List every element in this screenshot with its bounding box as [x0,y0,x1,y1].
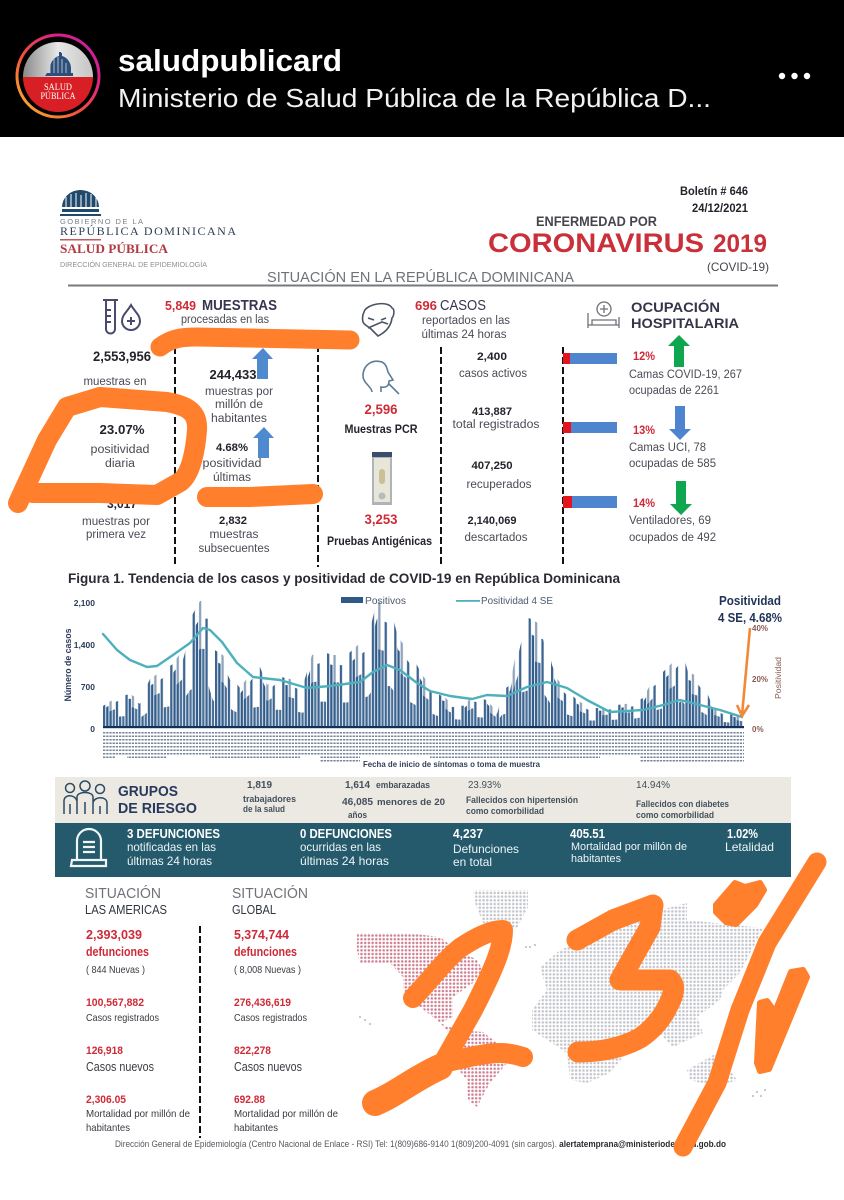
bar: camas covid [563,353,617,364]
stat: hipertensión: 23.93% [468,779,501,791]
stat: ventiladores: ocupados de 492 [629,532,716,544]
heading: muestras: MUESTRAS [202,298,277,314]
icon: people [64,781,107,814]
stat: muestras por primera vez: primera vez [86,529,146,541]
heading: ocupación hospitalaria [631,300,739,331]
stat: defunciones global: defunciones [234,944,297,959]
stat: defunciones notificadas: 3 DEFUNCIONES [127,827,220,841]
stat: mortalidad américas: habitantes [86,1122,130,1134]
stat: muestras por primera vez [82,497,150,541]
stat: letalidad [725,827,774,854]
account name: saludpublicard [118,43,342,78]
stat: muestras por millón: 244,433 [210,368,257,382]
figure title: Figura 1. Tendencia de los casos y positividad de COVID-19 en República Dominicana [68,571,620,586]
stat: camas covid [629,351,742,397]
stat: muestras pcr: 2,596 [364,402,398,417]
right axis labels: 0% [752,725,764,734]
stat: ventiladores: 14% [633,498,655,510]
stat: positividad últimas: últimas [213,472,251,484]
stat: pruebas antigénicas: Pruebas Antigénicas [327,534,432,548]
x axis title: Fecha de inicio de síntomas o toma de muestra [363,759,540,769]
stat: mortalidad global: Mortalidad por millón de [234,1108,338,1120]
stat: defunciones notificadas: últimas 24 horas [127,854,212,868]
stat: muestras por millón: millón de [215,399,263,411]
heading: global: SITUACIÓN [232,885,308,902]
icon: hospital bed [588,302,619,328]
panel: situación global [232,885,338,1134]
stat: recuperados: 407,250 [472,460,512,472]
stat: positividad diaria: positividad [90,444,150,456]
arrow: blue down [669,406,691,440]
stat: muestras en: muestras en [84,376,146,388]
stat: muestras subsecuentes: muestras [210,529,259,541]
stat: positividad diaria: diaria [105,458,136,470]
stat: hipertensión [466,779,578,817]
stat: positividad últimas: positividad [202,458,262,470]
stat: camas uci [629,425,716,470]
stat: casos nuevos américas [86,1045,154,1074]
bar: camas uci [563,422,617,433]
heading: grupos de riesgo: DE RIESGO [118,800,197,817]
stat: positividad diaria [90,423,150,470]
heading: casos: 696 [415,299,437,313]
stat: muestras pcr: Muestras PCR [344,422,418,436]
panel: casos [415,298,540,544]
stat: recuperados [466,460,532,491]
stat: trabajadores de la salud: trabajadores [243,794,296,805]
stat: mortalidad global: habitantes [234,1122,278,1134]
callout: positividad 4 SE: 4 SE, 4.68% [718,611,782,625]
stat: defunciones notificadas [127,827,220,868]
title: ENFERMEDAD POR [536,214,657,229]
panel: ocupación hospitalaria [563,300,742,544]
stat: defunciones américas: ( 844 Nuevas ) [86,964,145,976]
heading: muestras: procesadas en las [181,314,269,326]
stat: total registrados: total registrados [452,419,540,431]
stat: muestras en [84,349,151,388]
stat: total registrados: 413,887 [472,406,512,418]
government logo: SALUD PÚBLICA [60,242,168,256]
scribble: line over muestras [160,337,350,347]
stat: casos registrados global [234,997,307,1024]
heading: global [232,885,308,917]
stat: mortalidad: Mortalidad por millón de [571,841,687,853]
right axis labels: 40% [752,624,768,633]
legend: Positivos [365,596,406,607]
stat: casos registrados global: Casos registrados [234,1012,307,1024]
stat: ventiladores [629,498,716,544]
right axis labels [752,624,783,734]
icon: test tube and drop [103,300,140,334]
stat: camas uci: ocupadas de 585 [629,458,716,470]
stat: positividad diaria: 23.07% [100,423,144,437]
stat: casos activos: casos activos [459,368,527,380]
heading: las américas: LAS AMERICAS [85,903,167,917]
panel: muestras [82,298,277,555]
stat: pruebas antigénicas: 3,253 [364,512,398,527]
title: (COVID-19) [707,260,769,274]
stat: casos nuevos global: 822,278 [234,1045,271,1057]
stat: defunciones ocurridas: últimas 24 horas [300,854,389,868]
stat: embarazadas y menores: 1,614 [345,779,370,791]
stat: diabetes: 14.94% [636,779,670,791]
stat: casos activos: 2,400 [477,351,507,363]
heading: ocupación hospitalaria: HOSPITALARIA [631,316,739,331]
stat: casos activos [459,351,527,380]
arrow: up blue one [252,348,273,379]
panel: situación las américas [85,885,190,1134]
handwritten number 3 [577,905,674,1052]
bulletin number and date: 24/12/2021 [692,203,749,215]
arrow: orange pointer [737,628,750,716]
footer contact line: Dirección General de Epidemiología (Centro Nacional de Enlace - RSI) Tel: 1(809)686-9140 1(809)200-4091 (sin cargos). alertatemprana@ministeriodesalud.gob.do [115,1139,726,1150]
stat: casos registrados américas: 100,567,882 [86,997,144,1009]
map: americas in red [357,933,507,1107]
stat: positividad últimas: 4.68% [216,442,248,454]
account description: Ministerio de Salud Pública de la República D... [118,83,711,113]
stat: embarazadas y menores: 46,085 [342,796,373,808]
panel: defunciones [55,823,791,877]
world map [357,890,766,1107]
stat: defunciones ocurridas [300,827,392,868]
heading: las américas [85,885,167,917]
stat: recuperados: recuperados [466,479,532,491]
heading: casos: CASOS [440,298,486,314]
stat: defunciones en total: Defunciones [453,842,519,856]
stat: muestras subsecuentes [198,515,270,555]
stat: letalidad: Letalidad [725,840,774,854]
stat: trabajadores de la salud: 1,819 [247,779,272,791]
bar: ventiladores [563,496,617,508]
government logo [60,190,236,269]
heading: las américas: SITUACIÓN [85,885,161,902]
stat: muestras por millón: muestras por [205,386,273,398]
x axis date labels [103,732,744,763]
stat: defunciones global: ( 8,008 Nuevas ) [234,964,301,976]
stat: mortalidad global: 692.88 [234,1094,265,1106]
column dividers [175,345,563,1138]
stat: mortalidad [570,827,687,865]
stat: casos registrados global: 276,436,619 [234,997,291,1009]
stat: descartados: 2,140,069 [468,515,516,527]
stat: mortalidad américas: 2,306.05 [86,1094,126,1106]
stat: defunciones en total: en total [453,855,492,869]
stat: diabetes: como comorbilidad [636,810,714,821]
stat: defunciones ocurridas: ocurridas en las [300,840,381,854]
heading: muestras [165,298,277,326]
heading: grupos de riesgo [118,783,197,817]
map: islands [359,944,766,1097]
stat: muestras en: 2,553,956 [93,349,151,364]
icon: nasal swab [363,361,399,394]
stat: camas covid: ocupadas de 2261 [629,385,719,397]
stat: mortalidad américas: Mortalidad por millón de [86,1108,190,1120]
y axis labels: 2,100 [74,598,95,608]
stat: diabetes [636,779,729,821]
scribble: circle around positividad [18,397,197,503]
stat: muestras por primera vez: muestras por [82,516,150,528]
arrow: green down [670,481,692,515]
stat: descartados: descartados [464,532,528,544]
legend: Positividad 4 SE [481,596,553,607]
stat: pruebas antigénicas [327,512,432,548]
stat: mortalidad global [234,1094,338,1134]
stat: muestras por millón [205,368,273,425]
icon: antigen test strip [372,452,392,505]
stat: muestras pcr [344,402,418,436]
y axis labels: 700 [81,682,95,692]
title [488,214,769,274]
y axis labels [63,598,95,734]
stat: defunciones ocurridas: 0 DEFUNCIONES [300,827,392,841]
icon: tombstone [71,829,106,866]
stat: letalidad: 1.02% [727,827,758,841]
instagram header bar [0,0,844,137]
stat: descartados [464,515,528,544]
stat: defunciones global: 5,374,744 [234,927,290,942]
bulletin number and date [680,186,749,215]
stat: muestras por millón: habitantes [211,413,267,425]
y axis labels: Número de casos [63,628,73,702]
stat: embarazadas y menores: años [348,810,367,821]
stat: muestras por primera vez: 3,017 [107,497,137,511]
arrow: green up [668,335,690,367]
callout: positividad 4 SE [718,594,782,625]
heading: ocupación hospitalaria: OCUPACIÓN [631,300,720,315]
government logo: GOBIERNO DE LA [60,217,143,226]
stat: muestras subsecuentes: 2,832 [219,515,247,527]
heading: muestras: 5,849 [165,299,196,313]
stat: casos registrados américas: Casos registrados [86,1012,159,1024]
stat: camas covid: 12% [633,351,655,363]
stat: camas uci: Camas UCI, 78 [629,442,706,454]
profile avatar: SALUD [44,83,72,93]
bulletin number and date: Boletín # 646 [680,186,748,198]
heading: casos [415,298,510,341]
stat: defunciones notificadas: notificadas en las [127,840,216,854]
map: europe africa asia [532,903,763,1083]
stat: defunciones en total [453,827,519,869]
government logo: DIRECCIÓN GENERAL DE EPIDEMIOLOGÍA [60,260,207,269]
stat: ventiladores: Ventiladores, 69 [629,515,711,527]
axis baseline [103,726,744,728]
handwritten percent sign [683,862,817,1147]
heading: casos: reportados en las [422,315,510,327]
hand-drawn orange annotations [18,337,817,1147]
stat: casos registrados américas [86,997,159,1024]
right axis labels: Positividad [773,657,783,699]
stat: defunciones américas: 2,393,039 [86,927,142,942]
title: 2019 [713,230,767,258]
stat: positividad últimas [202,442,262,484]
section heading: SITUACIÓN EN LA REPÚBLICA DOMINICANA [267,269,574,286]
stat: muestras subsecuentes: subsecuentes [198,543,270,555]
stat: defunciones global [234,927,301,976]
heading: casos: últimas 24 horas [422,329,507,341]
stat: trabajadores de la salud [243,779,296,815]
heading: grupos de riesgo: GRUPOS [118,783,178,800]
profile avatar: PÚBLICA [40,90,76,102]
stat: embarazadas y menores: embarazadas [376,780,430,791]
stat: camas uci: 13% [633,425,655,437]
chart: casos y positividad [63,594,783,769]
more menu icon [779,73,810,79]
stat: mortalidad: 405.51 [570,827,605,841]
scribble: line under positividad [207,494,313,497]
stat: casos nuevos global [234,1045,302,1074]
stat: hipertensión: Fallecidos con hipertensión [466,795,578,806]
y axis labels: 1,400 [74,640,95,650]
stat: trabajadores de la salud: de la salud [243,804,285,815]
right axis labels: 20% [752,675,768,684]
stat: total registrados [452,406,540,431]
y axis labels: 0 [90,724,95,734]
stat: casos nuevos américas: 126,918 [86,1045,123,1057]
stat: casos nuevos global: Casos nuevos [234,1060,302,1074]
heading: global: GLOBAL [232,903,276,917]
stat: camas covid: Camas COVID-19, 267 [629,369,742,381]
stat: defunciones américas: defunciones [86,944,149,959]
callout: positividad 4 SE: Positividad [719,594,781,608]
handwritten number 2 [375,930,523,1103]
panel: pruebas [327,304,432,548]
stat: defunciones américas [86,927,149,976]
panel: grupos de riesgo [55,777,791,823]
legend [341,596,553,607]
arrow: up blue two [253,427,274,458]
icon: face mask [363,304,394,336]
title: CORONAVIRUS [488,228,704,258]
map: greenland [473,890,528,928]
profile avatar [17,35,99,117]
stat: diabetes: Fallecidos con diabetes [636,799,729,810]
map: oceania [687,1053,737,1087]
stat: mortalidad américas [86,1094,190,1134]
stat: casos nuevos américas: Casos nuevos [86,1060,154,1074]
stat: hipertensión: como comorbilidad [466,806,544,817]
stat: embarazadas y menores [342,779,445,821]
stat: mortalidad: habitantes [571,853,621,865]
positivity line [103,628,742,717]
stat: defunciones en total: 4,237 [453,827,483,841]
government logo: REPÚBLICA DOMINICANA [60,224,236,238]
stat: embarazadas y menores: menores de 20 [377,797,445,808]
case bars [103,601,743,727]
